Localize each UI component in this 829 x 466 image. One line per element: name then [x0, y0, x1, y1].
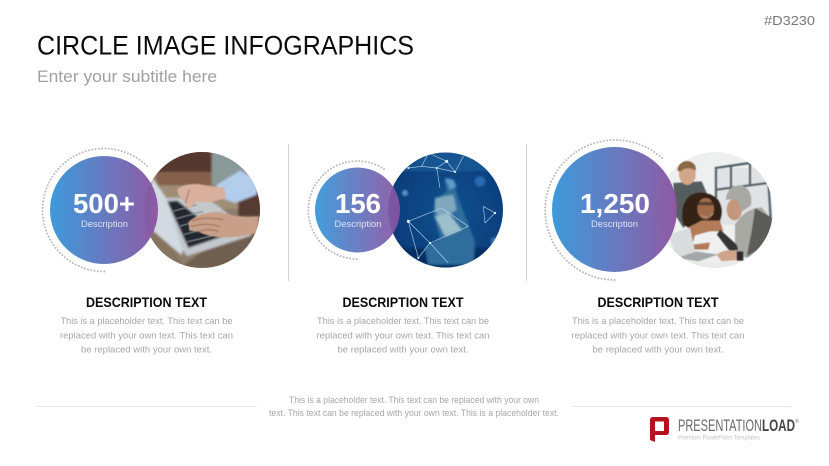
dotted arc: [308, 161, 384, 259]
number caption: Description: [334, 219, 382, 230]
column divider right: [526, 144, 527, 281]
number: 156: [335, 188, 381, 219]
gradient circle: [50, 156, 158, 264]
note line 2: text. This text can be replaced with your own text. This is a placeholder text.: [269, 408, 559, 418]
body line 1: This is a placeholder text. This text can be: [572, 316, 744, 327]
heading: DESCRIPTION TEXT: [86, 294, 207, 310]
photo: hands typing on laptop: [150, 152, 260, 268]
wordmark light: PRESENTATION: [678, 416, 762, 435]
body line 3: be replaced with your own text.: [592, 344, 724, 356]
body line 3: be replaced with your own text.: [81, 344, 212, 356]
registered mark: ®: [795, 418, 799, 425]
footer rule left: [37, 406, 257, 407]
heading: DESCRIPTION TEXT: [342, 294, 464, 310]
wordmark bold: LOAD: [762, 416, 795, 435]
body line 3: be replaced with your own text.: [338, 344, 468, 356]
logo: PresentationLoad: [650, 416, 799, 442]
gradient circle: [552, 147, 677, 272]
photo: team at a laptop: [668, 152, 773, 268]
template code: #D3230: [764, 14, 815, 28]
number: 500+: [73, 188, 135, 219]
body line 2: replaced with your own text. This text can: [572, 330, 744, 342]
tagline: Premium PowerPoint Templates: [678, 436, 760, 442]
note line 1: This is a placeholder text. This text can be replaced with your own: [289, 395, 539, 405]
footer note: [269, 395, 559, 418]
number caption: Description: [81, 219, 128, 230]
gradient circle: [315, 168, 400, 252]
text block: column 3: [572, 294, 744, 356]
body line 2: replaced with your own text. This text can: [60, 330, 233, 342]
number: 1,250: [580, 188, 650, 219]
heading: DESCRIPTION TEXT: [598, 294, 719, 310]
footer rule right: [572, 406, 791, 407]
body line 1: This is a placeholder text. This text can be: [317, 316, 489, 327]
dotted arc: [43, 149, 147, 272]
body line 2: replaced with your own text. This text can: [316, 330, 490, 342]
dotted arc: [545, 140, 662, 280]
photo: robotic hand and network: [388, 152, 503, 268]
body line 1: This is a placeholder text. This text can be: [60, 316, 232, 327]
panel: stat 500+: [43, 148, 265, 272]
title: CIRCLE IMAGE INFOGRAPHICS: [37, 30, 414, 60]
icon: red speech-bubble P: [650, 417, 669, 442]
panel: stat 1,250: [545, 140, 777, 280]
text block: column 2: [316, 294, 490, 356]
subtitle: Enter your subtitle here: [37, 67, 217, 86]
panel: stat 156: [308, 148, 505, 272]
text block: column 1: [60, 294, 233, 356]
number caption: Description: [591, 219, 638, 230]
column divider left: [288, 144, 289, 281]
